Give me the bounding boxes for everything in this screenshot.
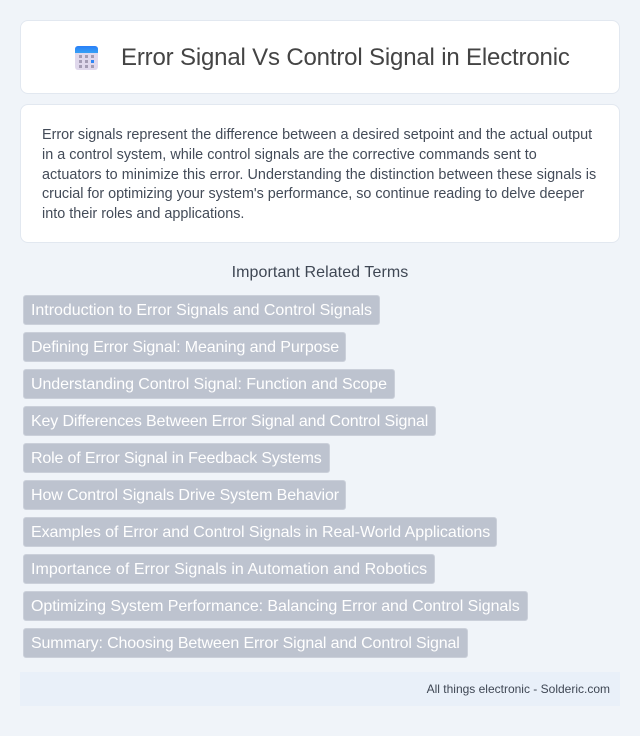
intro text: crucial for optimizing your system's performance, so continue reading to delve deeper (42, 186, 584, 202)
tag (23, 443, 330, 473)
intro text (42, 127, 596, 222)
tag: How Control Signals Drive System Behavior (31, 487, 339, 504)
tag (23, 517, 497, 547)
tag: Understanding Control Signal: Function and Scope (31, 376, 387, 393)
intro text panel (20, 104, 620, 243)
footer (20, 672, 620, 706)
header card (20, 20, 620, 94)
tag: Optimizing System Performance: Balancing Error and Control Signals (31, 598, 520, 615)
tag (23, 332, 346, 362)
tag: Summary: Choosing Between Error Signal and Control Signal (31, 635, 460, 652)
intro text: actuators to minimize this error. Understanding the distinction between these signals is (42, 167, 596, 183)
intro text: Error signals represent the difference between a desired setpoint and the actual output (42, 127, 592, 143)
tag (23, 554, 435, 584)
tag (23, 295, 380, 325)
tag: Key Differences Between Error Signal and Control Signal (31, 413, 428, 430)
tag: Importance of Error Signals in Automation and Robotics (31, 561, 427, 578)
section heading: Important Related Terms (232, 264, 408, 281)
tag: Examples of Error and Control Signals in Real-World Applications (31, 524, 490, 541)
tag: Introduction to Error Signals and Control Signals (31, 302, 372, 319)
tag (23, 369, 395, 399)
intro text: into their roles and applications. (42, 206, 244, 222)
tag (23, 480, 346, 510)
tag: Defining Error Signal: Meaning and Purpose (31, 339, 339, 356)
tag (23, 591, 528, 621)
intro text: in a control system, while control signals are the corrective commands sent to (42, 147, 537, 163)
title: Error Signal Vs Control Signal in Electronic (121, 44, 570, 71)
tag (23, 628, 468, 658)
footer text: All things electronic - Solderic.com (427, 682, 610, 696)
tag (23, 406, 436, 436)
icon: calendar (75, 46, 98, 70)
tag: Role of Error Signal in Feedback Systems (31, 450, 322, 467)
